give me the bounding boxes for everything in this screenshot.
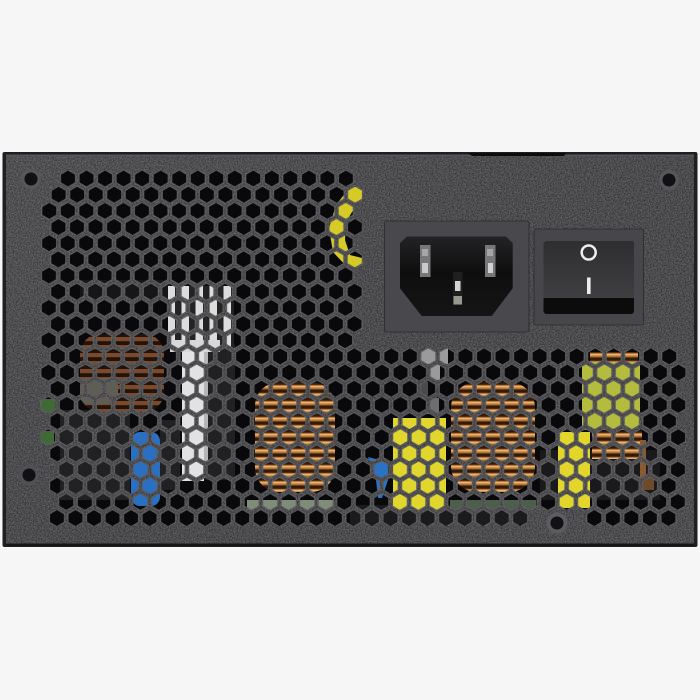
rocker upper part xyxy=(544,241,634,298)
power inlet socket xyxy=(384,221,529,332)
component: left copper coil xyxy=(80,334,164,412)
component: centre copper coil xyxy=(255,382,335,492)
switch frame xyxy=(534,229,644,325)
component: yellow capacitor top xyxy=(329,187,362,272)
top notch xyxy=(468,153,566,156)
symbol: I xyxy=(587,278,591,294)
screw: top right xyxy=(659,170,679,190)
component: grey-green board strip xyxy=(247,500,335,510)
component: blue capacitor xyxy=(131,432,160,506)
component: small copper coil right xyxy=(590,352,654,490)
dark internal shadows xyxy=(60,280,660,525)
component: olive capacitor xyxy=(582,362,640,430)
right pin xyxy=(485,245,496,277)
illustration: power supply rear panel xyxy=(2,152,698,547)
rocker switch xyxy=(534,229,644,325)
component: right copper coil xyxy=(451,382,535,492)
socket plate xyxy=(384,221,529,332)
perforated rear panel xyxy=(6,154,694,544)
component: yellow capacitor right xyxy=(558,432,590,508)
component: yellow capacitor left xyxy=(393,418,446,510)
internal components seen through the mesh xyxy=(30,165,690,535)
component: small blue capacitor xyxy=(368,457,388,498)
chassis outer edge xyxy=(2,152,698,547)
left pin xyxy=(420,245,430,277)
screw: top left xyxy=(21,169,41,189)
component: white heatsink xyxy=(168,286,234,481)
bottom edge highlight xyxy=(6,544,694,546)
component: grey part xyxy=(80,378,118,404)
ground pin xyxy=(453,272,462,305)
component: green parts xyxy=(41,399,55,445)
rocker lower part xyxy=(544,295,634,314)
screw: bottom left xyxy=(19,465,39,485)
mesh rims xyxy=(39,170,687,526)
socket recess xyxy=(400,236,513,316)
component: grey part centre xyxy=(418,348,448,414)
symbol: O xyxy=(582,246,596,260)
screw: bottom centre xyxy=(546,512,568,534)
component: green board strip xyxy=(450,500,536,510)
